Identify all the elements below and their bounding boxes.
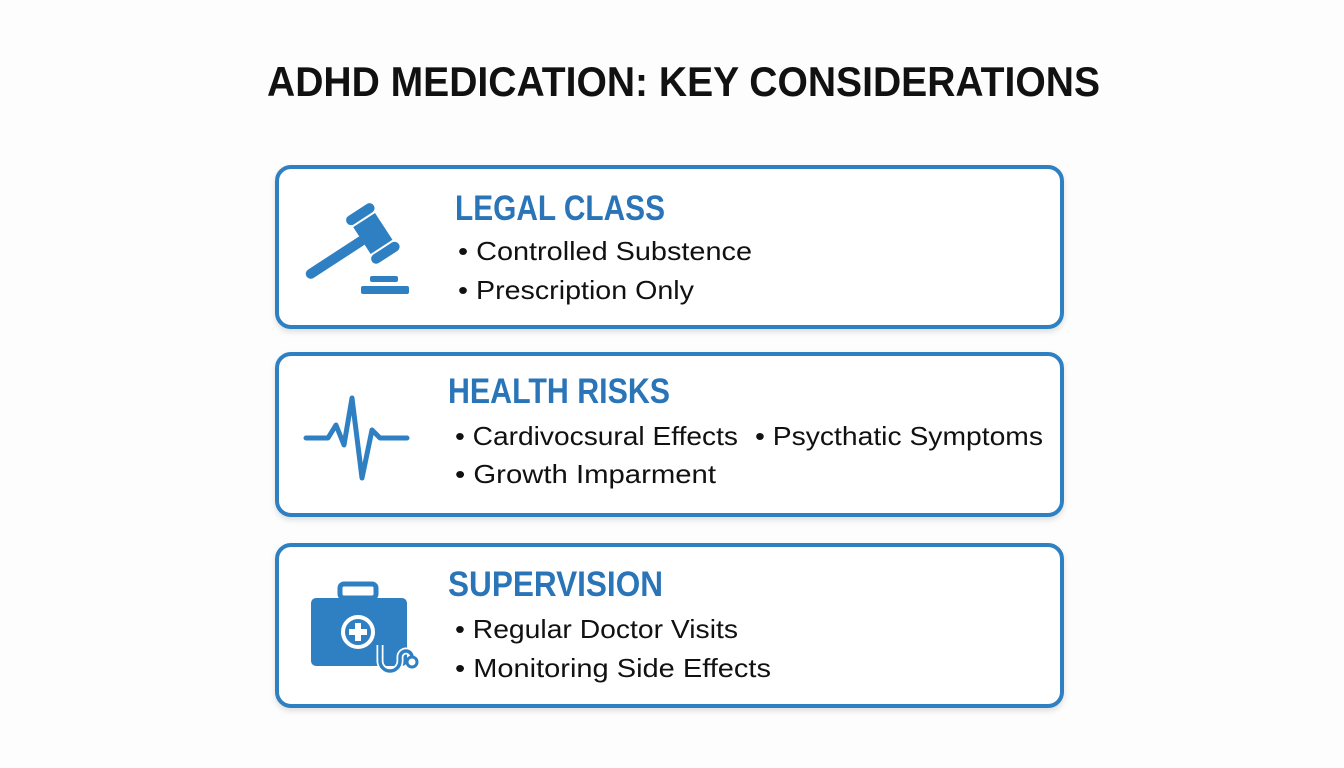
icon: gavel [291,201,409,300]
bullets: legal class [458,236,752,305]
bullets: health risks: • Psycthatic Symptoms [755,421,1043,451]
heading: health risks: HEALTH RISKS [448,372,670,411]
bullets: supervision: • Monitoring Side Effects [455,653,771,683]
bullets: supervision: • Regular Doctor Visits [455,614,738,644]
bullets: legal class: • Prescription Only [458,275,694,305]
panel: health risks [277,354,1062,515]
icon: medical bag [311,584,417,671]
bullets: supervision [455,614,771,683]
title: ADHD MEDICATION: KEY CONSIDERATIONS [267,58,1100,105]
heading: legal class: LEGAL CLASS [455,189,665,228]
bullets: health risks: • Growth Imparment [455,459,717,489]
bullets: health risks [455,421,1043,489]
heading: supervision: SUPERVISION [448,565,663,604]
panel: supervision [277,545,1062,706]
bullets: health risks: • Cardivocsural Effects [455,421,738,451]
bullets: legal class: • Controlled Substence [458,236,752,266]
icon: heartbeat [306,398,407,478]
panel: legal class [277,167,1062,327]
